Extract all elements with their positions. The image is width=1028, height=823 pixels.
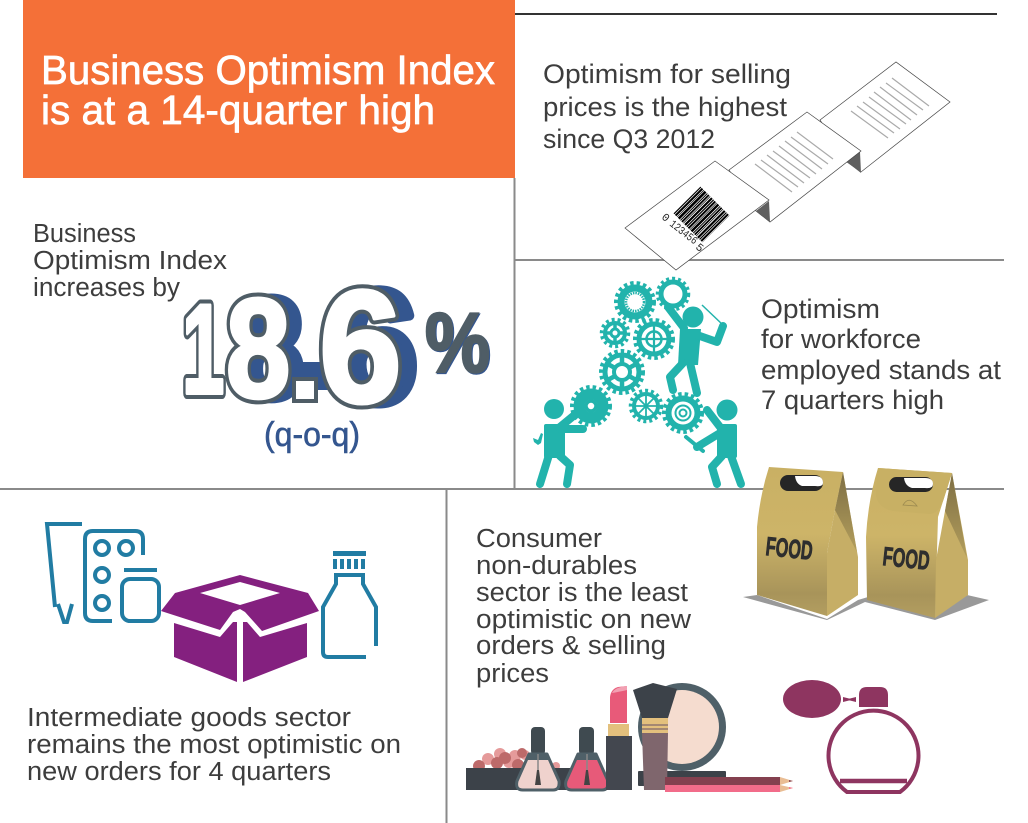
title text: is at a 14-quarter high [41,87,435,133]
icon: workers assembling gears [533,278,741,484]
text: workforce optimism: Optimism [761,294,880,324]
icon: compact mirror [638,683,726,786]
text: business optimism increase: Optimism Index [33,247,227,275]
icon: nail polish red [566,727,608,790]
icon: receipt with barcode: 0 [658,212,671,225]
title text [41,47,495,133]
icon: perfume bottle [783,680,918,792]
text: selling prices optimism: prices is the highest [543,92,788,122]
worker right [686,400,741,484]
gear 1 [616,283,654,321]
text: selling prices optimism: Optimism for selling [543,59,791,89]
icon: pencils [665,777,793,792]
text: intermediate goods: new orders for 4 quarters [27,758,331,786]
text: consumer non-durables: optimistic on new [476,606,692,634]
title banner [23,0,515,178]
icon: open box [161,575,319,682]
text: consumer non-durables [476,525,692,688]
icon: pill blister and jar [47,524,159,622]
big number 18.6%: 6 [319,257,402,436]
icon: makeup brush [633,683,677,790]
title text: Business Optimism Index [41,47,495,93]
text: consumer non-durables: orders & selling [476,632,666,660]
icon: receipt with barcode: 5 [692,242,705,255]
bag 1 [757,467,858,616]
big number 18.6%: 8 [239,270,303,428]
big number 18.6%: 6 [319,257,402,436]
big number 18.6%: 8 [226,270,290,428]
text: business optimism increase: Business [33,220,136,248]
text: consumer non-durables: sector is the least [476,579,688,607]
text: intermediate goods: Intermediate goods sector [27,704,352,732]
big number 18.6%: 8 [226,270,290,428]
gear 7 [630,390,662,422]
worker top [668,305,723,393]
text: business optimism increase [33,220,227,302]
text: selling prices optimism [543,59,791,154]
gear 6 [572,387,610,425]
text: intermediate goods [27,704,401,786]
icon: food bags [743,467,989,620]
big number 18.6%: % [425,296,490,390]
icon: bottle [323,551,376,657]
text: workforce optimism: employed stands at [761,355,1002,385]
icon: receipt with barcode [625,62,950,270]
text: workforce optimism: 7 quarters high [761,385,944,415]
text: consumer non-durables: non-durables [476,552,637,580]
icon: nail polish pale [517,727,559,790]
bag 1: FOOD [764,532,814,566]
gear 5 [601,351,643,393]
text: intermediate goods: remains the most optimistic on [27,731,401,759]
text: selling prices optimism: since Q3 2012 [543,124,715,154]
big number 18.6% [182,257,491,436]
icon: blush tray [466,748,570,790]
label: q-o-q: (q-o-q) [264,416,360,454]
big number 18.6%: 1 [182,279,224,421]
text: consumer non-durables: prices [476,660,549,688]
text: workforce optimism: for workforce [761,324,921,354]
gear 3 [602,320,628,346]
text: workforce optimism [761,294,1002,415]
big number 18.6%: 6 [335,257,418,436]
bag 2 [866,468,968,618]
gear 8 [664,394,702,432]
icon: intermediate goods [47,524,376,682]
bag 2: FOOD [881,542,931,576]
text: business optimism increase: increases by [33,274,180,302]
gear 4 [635,320,673,358]
icon: cosmetics [466,683,793,792]
worker left [533,399,583,484]
icon: receipt with barcode: 123456 [667,219,699,248]
icon: lipstick [606,686,632,790]
big number 18.6%: % [426,297,491,391]
big number 18.6%: 1 [182,279,224,421]
text: consumer non-durables: Consumer [476,525,603,553]
gear 2 [658,278,688,310]
